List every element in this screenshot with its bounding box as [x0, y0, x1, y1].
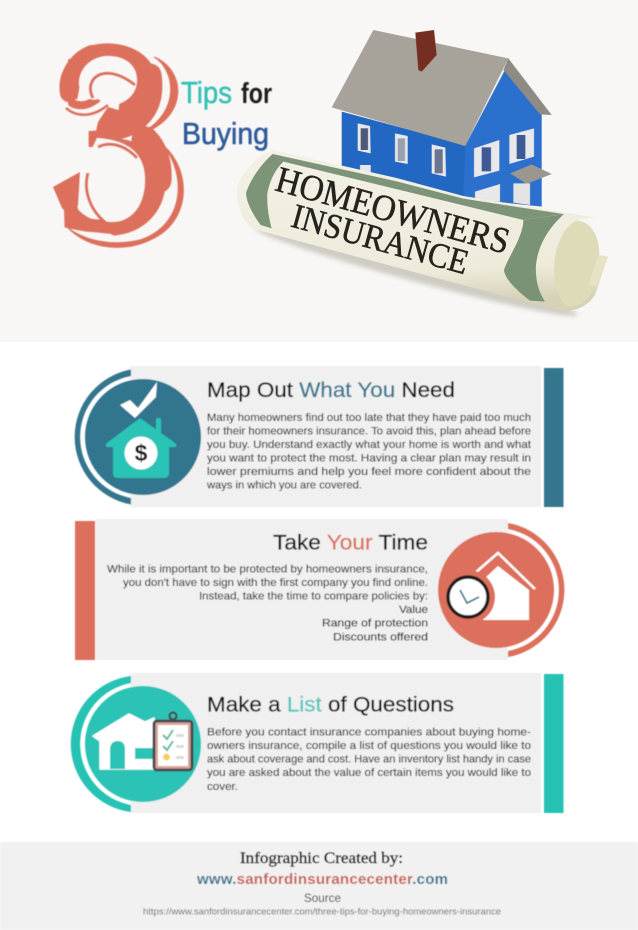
- body text: for their homeowners insurance. To avoid this, plan ahead before: [207, 426, 531, 438]
- body text: ask about coverage and cost. Have an inventory list handy in case: [207, 754, 531, 766]
- photo: model house and rolled insurance document: [237, 30, 608, 324]
- body text: Instead, take the time to compare policies by:: [199, 590, 428, 602]
- body text: ways in which you are covered.: [206, 480, 362, 492]
- body text: you want to protect the most. Having a clear plan may result in: [207, 452, 531, 464]
- body text: owners insurance, compile a list of questions you would like to: [207, 740, 531, 752]
- body text: cover.: [207, 781, 238, 793]
- website: www.sanfordinsurancecenter.com: [196, 871, 448, 888]
- source label: Source: [304, 893, 341, 905]
- icon: house with dollar sign: [75, 370, 201, 504]
- panel: Take Your Time: [75, 519, 564, 660]
- scroll wording: HOMEOWNERS INSURANCE: HOMEOWNERS: [272, 158, 514, 262]
- body text: Discounts offered: [333, 632, 428, 644]
- heading: Make a List of Questions: [207, 693, 454, 717]
- body text: you don't have to sign with the first company you find online.: [123, 577, 428, 589]
- accent bar: [544, 674, 564, 813]
- icon: house with clock: [438, 523, 564, 657]
- panel background: [96, 519, 508, 660]
- body text: you are asked about the value of certain items you would like to: [207, 767, 531, 779]
- panel background: [130, 366, 541, 507]
- shadow: [253, 219, 580, 324]
- body text: you buy. Understand exactly what your home is worth and what: [207, 439, 531, 451]
- panel: Map Out What You Need: [75, 366, 564, 507]
- footer: [0, 842, 638, 930]
- numeral 3: 3: [55, 0, 165, 288]
- accent bar: [75, 521, 95, 660]
- icon: blue model house: [332, 30, 552, 207]
- heading: Tips for Buying: for: [241, 78, 272, 110]
- credit heading: Infographic Created by:: [240, 850, 403, 867]
- body text: [107, 564, 428, 644]
- scroll wording: HOMEOWNERS INSURANCE: INSURANCE: [288, 196, 473, 282]
- body text: lower premiums and help you feel more confident about the: [207, 466, 531, 478]
- heading: Tips for Buying: Tips: [181, 75, 232, 110]
- body text: While it is important to be protected by homeowners insurance,: [107, 564, 428, 576]
- hero background: [0, 0, 638, 342]
- body text: Before you contact insurance companies about buying home-: [207, 727, 531, 739]
- icon: house with dollar sign: $: [135, 440, 148, 466]
- heading: Tips for Buying: Buying: [182, 116, 269, 151]
- body text: [207, 727, 531, 793]
- body text: Range of protection: [322, 618, 428, 630]
- icon: rolled document: [237, 150, 608, 311]
- icon: house with checklist: [71, 676, 201, 812]
- heading: Tips for Buying: [181, 75, 272, 151]
- body text: Many homeowners find out too late that they have paid too much: [207, 412, 531, 424]
- accent bar: [544, 368, 564, 507]
- heading: Map Out What You Need: [207, 378, 455, 402]
- body text: Value: [399, 604, 428, 616]
- panel background: [130, 673, 541, 813]
- source url: https://www.sanfordinsurancecenter.com/three-tips-for-buying-homeowners-insurance: [143, 907, 501, 917]
- heading: Take Your Time: [273, 530, 428, 554]
- body text: [206, 412, 531, 492]
- panel: Make a List of Questions: [71, 673, 564, 813]
